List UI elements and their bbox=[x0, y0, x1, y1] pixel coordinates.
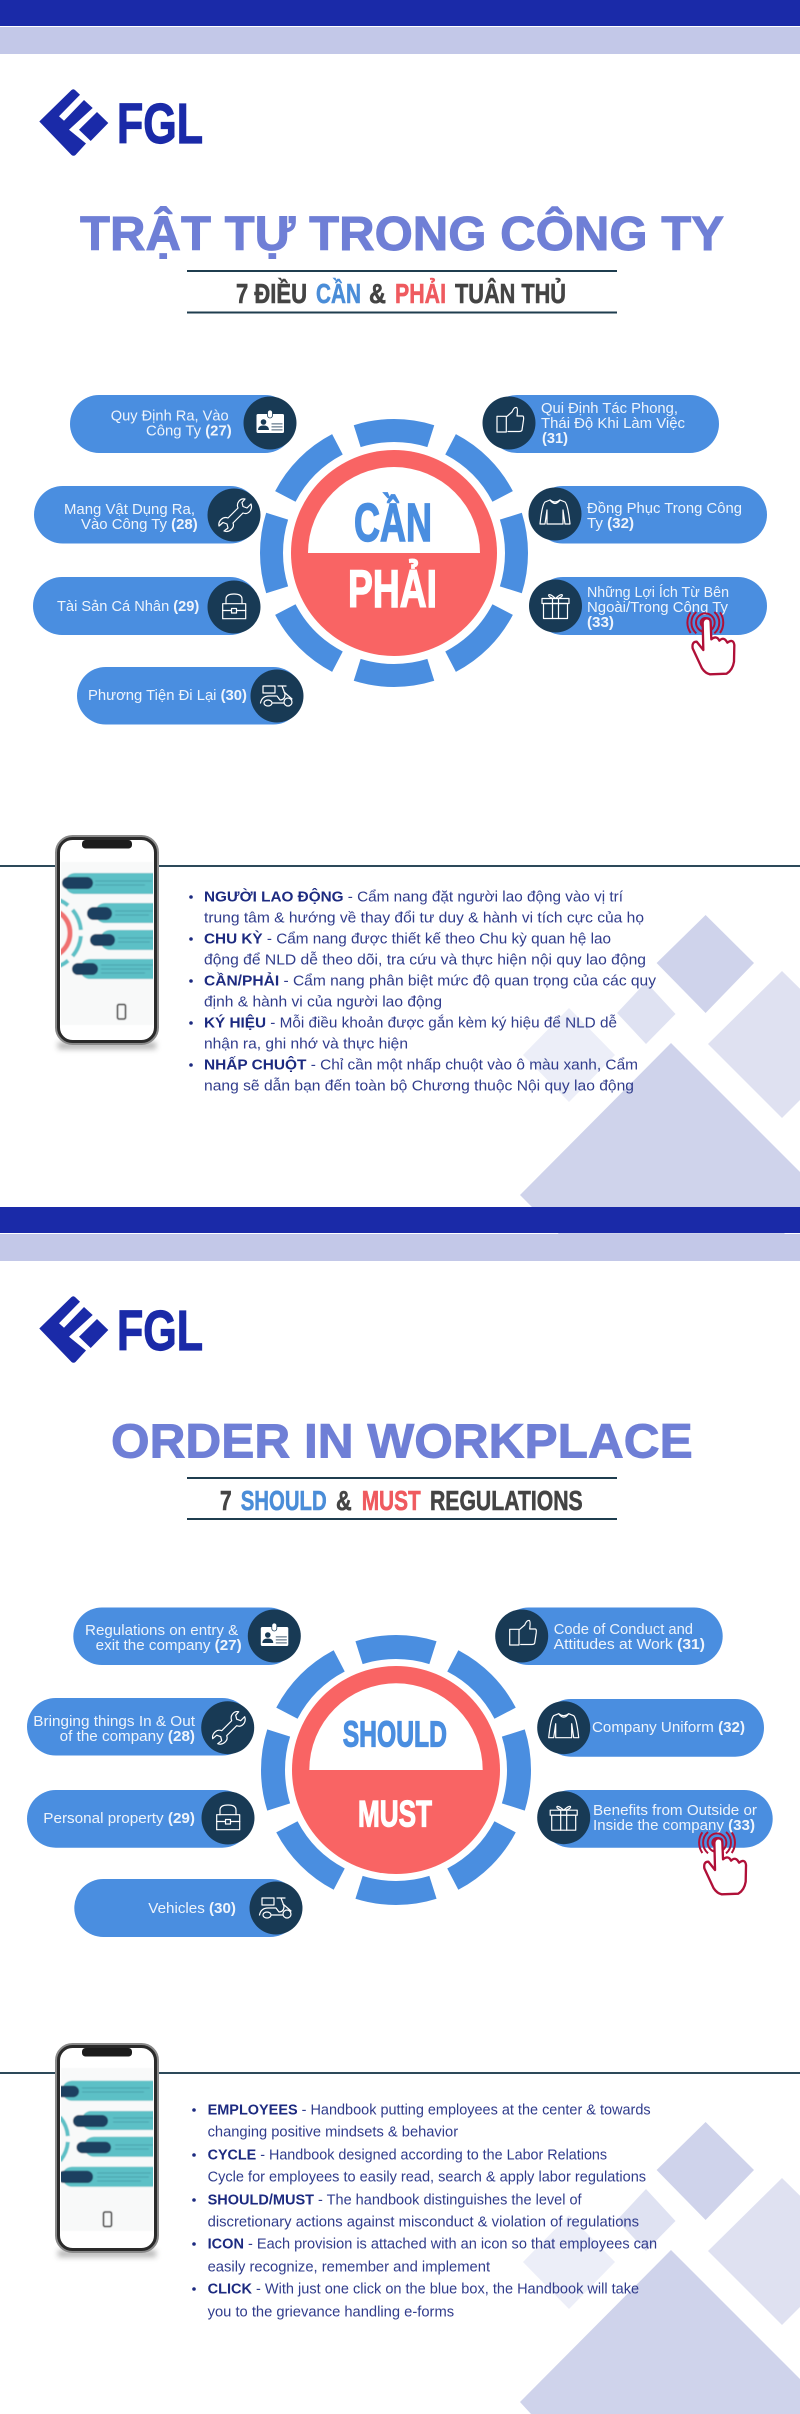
pill: rule 28: Vào Công Ty (28) bbox=[81, 516, 198, 533]
pill: rule 31 bbox=[482, 395, 719, 453]
pill: rule 33: Những Lợi Ích Từ Bên bbox=[587, 584, 729, 601]
pill: regulation 28: Bringing things In & Out bbox=[33, 1713, 196, 1730]
pill: regulation 30 bbox=[74, 1879, 302, 1937]
pill: rule 33: Ngoài/Trong Công Ty bbox=[587, 599, 728, 616]
bullet list: English notes: easily recognize, remember and implement bbox=[208, 2260, 490, 2276]
subtitle: English: MUST bbox=[362, 1485, 421, 1516]
pill: regulation 29: Personal property (29) bbox=[43, 1810, 195, 1827]
pill: regulation 33 bbox=[537, 1790, 773, 1848]
logo: FGL, English section bbox=[39, 1296, 203, 1363]
bullet list: English notes: EMPLOYEES - Handbook putting employees at the center & towards bbox=[208, 2103, 651, 2119]
central dial: English bbox=[273, 1647, 519, 1893]
central dial: Vietnamese: CẦN bbox=[354, 493, 432, 553]
logo: FGL bbox=[39, 89, 203, 156]
subtitle: English: & bbox=[336, 1485, 352, 1516]
divider line with phone: top section bbox=[0, 865, 800, 867]
subtitle: English: REGULATIONS bbox=[430, 1485, 583, 1516]
bullet list: English notes: CYCLE - Handbook designed according to the Labor Relations bbox=[208, 2148, 607, 2164]
pill: rule 31: (31) bbox=[542, 430, 568, 447]
subtitle: English: 7 bbox=[220, 1485, 232, 1516]
subtitle: English bbox=[187, 1477, 617, 1520]
phone mockup: top section bbox=[55, 835, 159, 1052]
bullet list: Vietnamese notes: nhận ra, ghi nhớ và thực hiện bbox=[204, 1037, 408, 1053]
pill: rule 32: Đồng Phục Trong Công bbox=[587, 500, 742, 517]
pill: rule 32: Ty (32) bbox=[587, 515, 634, 532]
decorative diamonds, top section bbox=[520, 915, 800, 1347]
subtitle: Vietnamese: 7 ĐIỀU bbox=[236, 278, 307, 309]
pill: regulation 28: of the company (28) bbox=[60, 1728, 195, 1745]
subtitle: Vietnamese: CẦN bbox=[316, 278, 361, 309]
pill: rule 27: Quy Định Ra, Vào bbox=[111, 408, 229, 425]
bullet list: English notes: ICON - Each provision is attached with an icon so that employees can bbox=[208, 2237, 657, 2253]
header band: top section bbox=[0, 0, 800, 54]
subtitle: English: SHOULD bbox=[241, 1485, 327, 1516]
bullet list: Vietnamese notes: NHẤP CHUỘT - Chỉ cần một nhấp chuột vào ô màu xanh, Cẩm bbox=[204, 1056, 638, 1074]
pill: regulation 29 bbox=[27, 1790, 254, 1848]
bullet list: English notes: CLICK - With just one click on the blue box, the Handbook will take bbox=[208, 2282, 639, 2298]
bullet list: Vietnamese notes: nang sẽ dẫn bạn đến toàn bộ Chương thuộc Nội quy lao động bbox=[204, 1078, 634, 1095]
bullet list: Vietnamese notes: trung tâm & hướng về thay đổi tư duy & hành vi tích cực của họ bbox=[204, 911, 644, 927]
pill: rule 27 bbox=[70, 395, 296, 453]
pill: regulation 31: Code of Conduct and bbox=[554, 1621, 693, 1638]
bullet list: English notes: SHOULD/MUST - The handbook distinguishes the level of bbox=[208, 2193, 583, 2209]
central dial: English: MUST bbox=[358, 1794, 432, 1835]
central dial: Vietnamese bbox=[272, 430, 516, 676]
bullet list: English notes: discretionary actions against misconduct & violation of regulations bbox=[208, 2215, 639, 2231]
icon: clicking hand, English section bbox=[699, 1832, 746, 1894]
pill: regulation 33: Inside the company (33) bbox=[593, 1817, 755, 1834]
title: Vietnamese: TRẬT TỰ TRONG CÔNG TY bbox=[80, 206, 724, 261]
subtitle: Vietnamese: & bbox=[369, 278, 386, 309]
bullet list: English notes bbox=[192, 2103, 657, 2321]
pill: regulation 32 bbox=[537, 1699, 764, 1757]
pill: regulation 32: Company Uniform (32) bbox=[592, 1719, 745, 1736]
subtitle: Vietnamese: TUÂN THỦ bbox=[455, 277, 566, 309]
bullet list: English notes: changing positive mindsets & behavior bbox=[208, 2125, 458, 2141]
logo: FGL, English section: FGL bbox=[117, 1299, 203, 1363]
pill: rule 27: Công Ty (27) bbox=[146, 423, 232, 440]
icon: clicking hand bbox=[687, 612, 734, 674]
title: English: ORDER IN WORKPLACE bbox=[111, 1416, 693, 1468]
pill: rule 28 bbox=[34, 486, 260, 544]
bullet list: Vietnamese notes: CẦN/PHẢI - Cẩm nang phân biệt mức độ quan trọng của các quy bbox=[204, 973, 657, 990]
pill: regulation 27: Regulations on entry & bbox=[85, 1622, 238, 1639]
subtitle: Vietnamese: PHẢI bbox=[395, 277, 446, 309]
divider line with phone: bottom section bbox=[0, 2072, 800, 2074]
bullet list: Vietnamese notes: NGƯỜI LAO ĐỘNG - Cẩm nang đặt người lao động vào vị trí bbox=[204, 888, 623, 906]
pill: rule 30: Phương Tiện Đi Lại (30) bbox=[88, 687, 247, 704]
bullet list: Vietnamese notes: CHU KỲ - Cẩm nang được thiết kế theo Chu kỳ quan hệ lao bbox=[204, 930, 611, 948]
subtitle: Vietnamese bbox=[187, 270, 617, 314]
pill: regulation 33: Benefits from Outside or bbox=[593, 1802, 757, 1819]
pill: rule 28: Mang Vật Dụng Ra, bbox=[64, 501, 195, 518]
decorative diamonds, bottom section bbox=[520, 2122, 800, 2414]
pill: rule 33 bbox=[529, 577, 767, 635]
pill: rule 29: Tài Sản Cá Nhân (29) bbox=[57, 598, 199, 615]
bullet list: English notes: you to the grievance handling e-forms bbox=[208, 2305, 454, 2321]
pill: rule 32 bbox=[528, 486, 767, 544]
bullet list: Vietnamese notes: định & hành vi của người lao động bbox=[204, 995, 442, 1011]
central dial: English: SHOULD bbox=[343, 1714, 447, 1755]
central dial: Vietnamese: PHẢI bbox=[348, 559, 437, 619]
pill: rule 31: Thái Độ Khi Làm Việc bbox=[541, 415, 685, 432]
pill: regulation 30: Vehicles (30) bbox=[148, 1900, 236, 1917]
pill: regulation 27: exit the company (27) bbox=[96, 1637, 242, 1654]
bullet list: English notes: Cycle for employees to easily read, search & apply labor regulations bbox=[208, 2170, 646, 2186]
bullet list: Vietnamese notes: KÝ HIỆU - Mỗi điều khoản được gắn kèm ký hiệu để NLD dễ bbox=[204, 1014, 617, 1032]
pill: regulation 27 bbox=[73, 1608, 301, 1665]
pill: regulation 31: Attitudes at Work (31) bbox=[554, 1636, 705, 1653]
pill: rule 31: Qui Định Tác Phong, bbox=[541, 400, 678, 417]
bullet list: Vietnamese notes bbox=[189, 888, 657, 1095]
pill: rule 29 bbox=[33, 577, 260, 635]
pill: regulation 28 bbox=[27, 1698, 254, 1756]
header band: bottom section bbox=[0, 1207, 800, 1461]
phone mockup: bottom section bbox=[55, 2043, 159, 2260]
pill: rule 30 bbox=[77, 667, 304, 724]
pill: regulation 31 bbox=[495, 1608, 723, 1665]
bullet list: Vietnamese notes: động để NLD dễ theo dõi, tra cứu và thực hiện nội quy lao động bbox=[204, 952, 646, 969]
pill: rule 33: (33) bbox=[587, 614, 614, 631]
logo: FGL: FGL bbox=[117, 92, 203, 156]
